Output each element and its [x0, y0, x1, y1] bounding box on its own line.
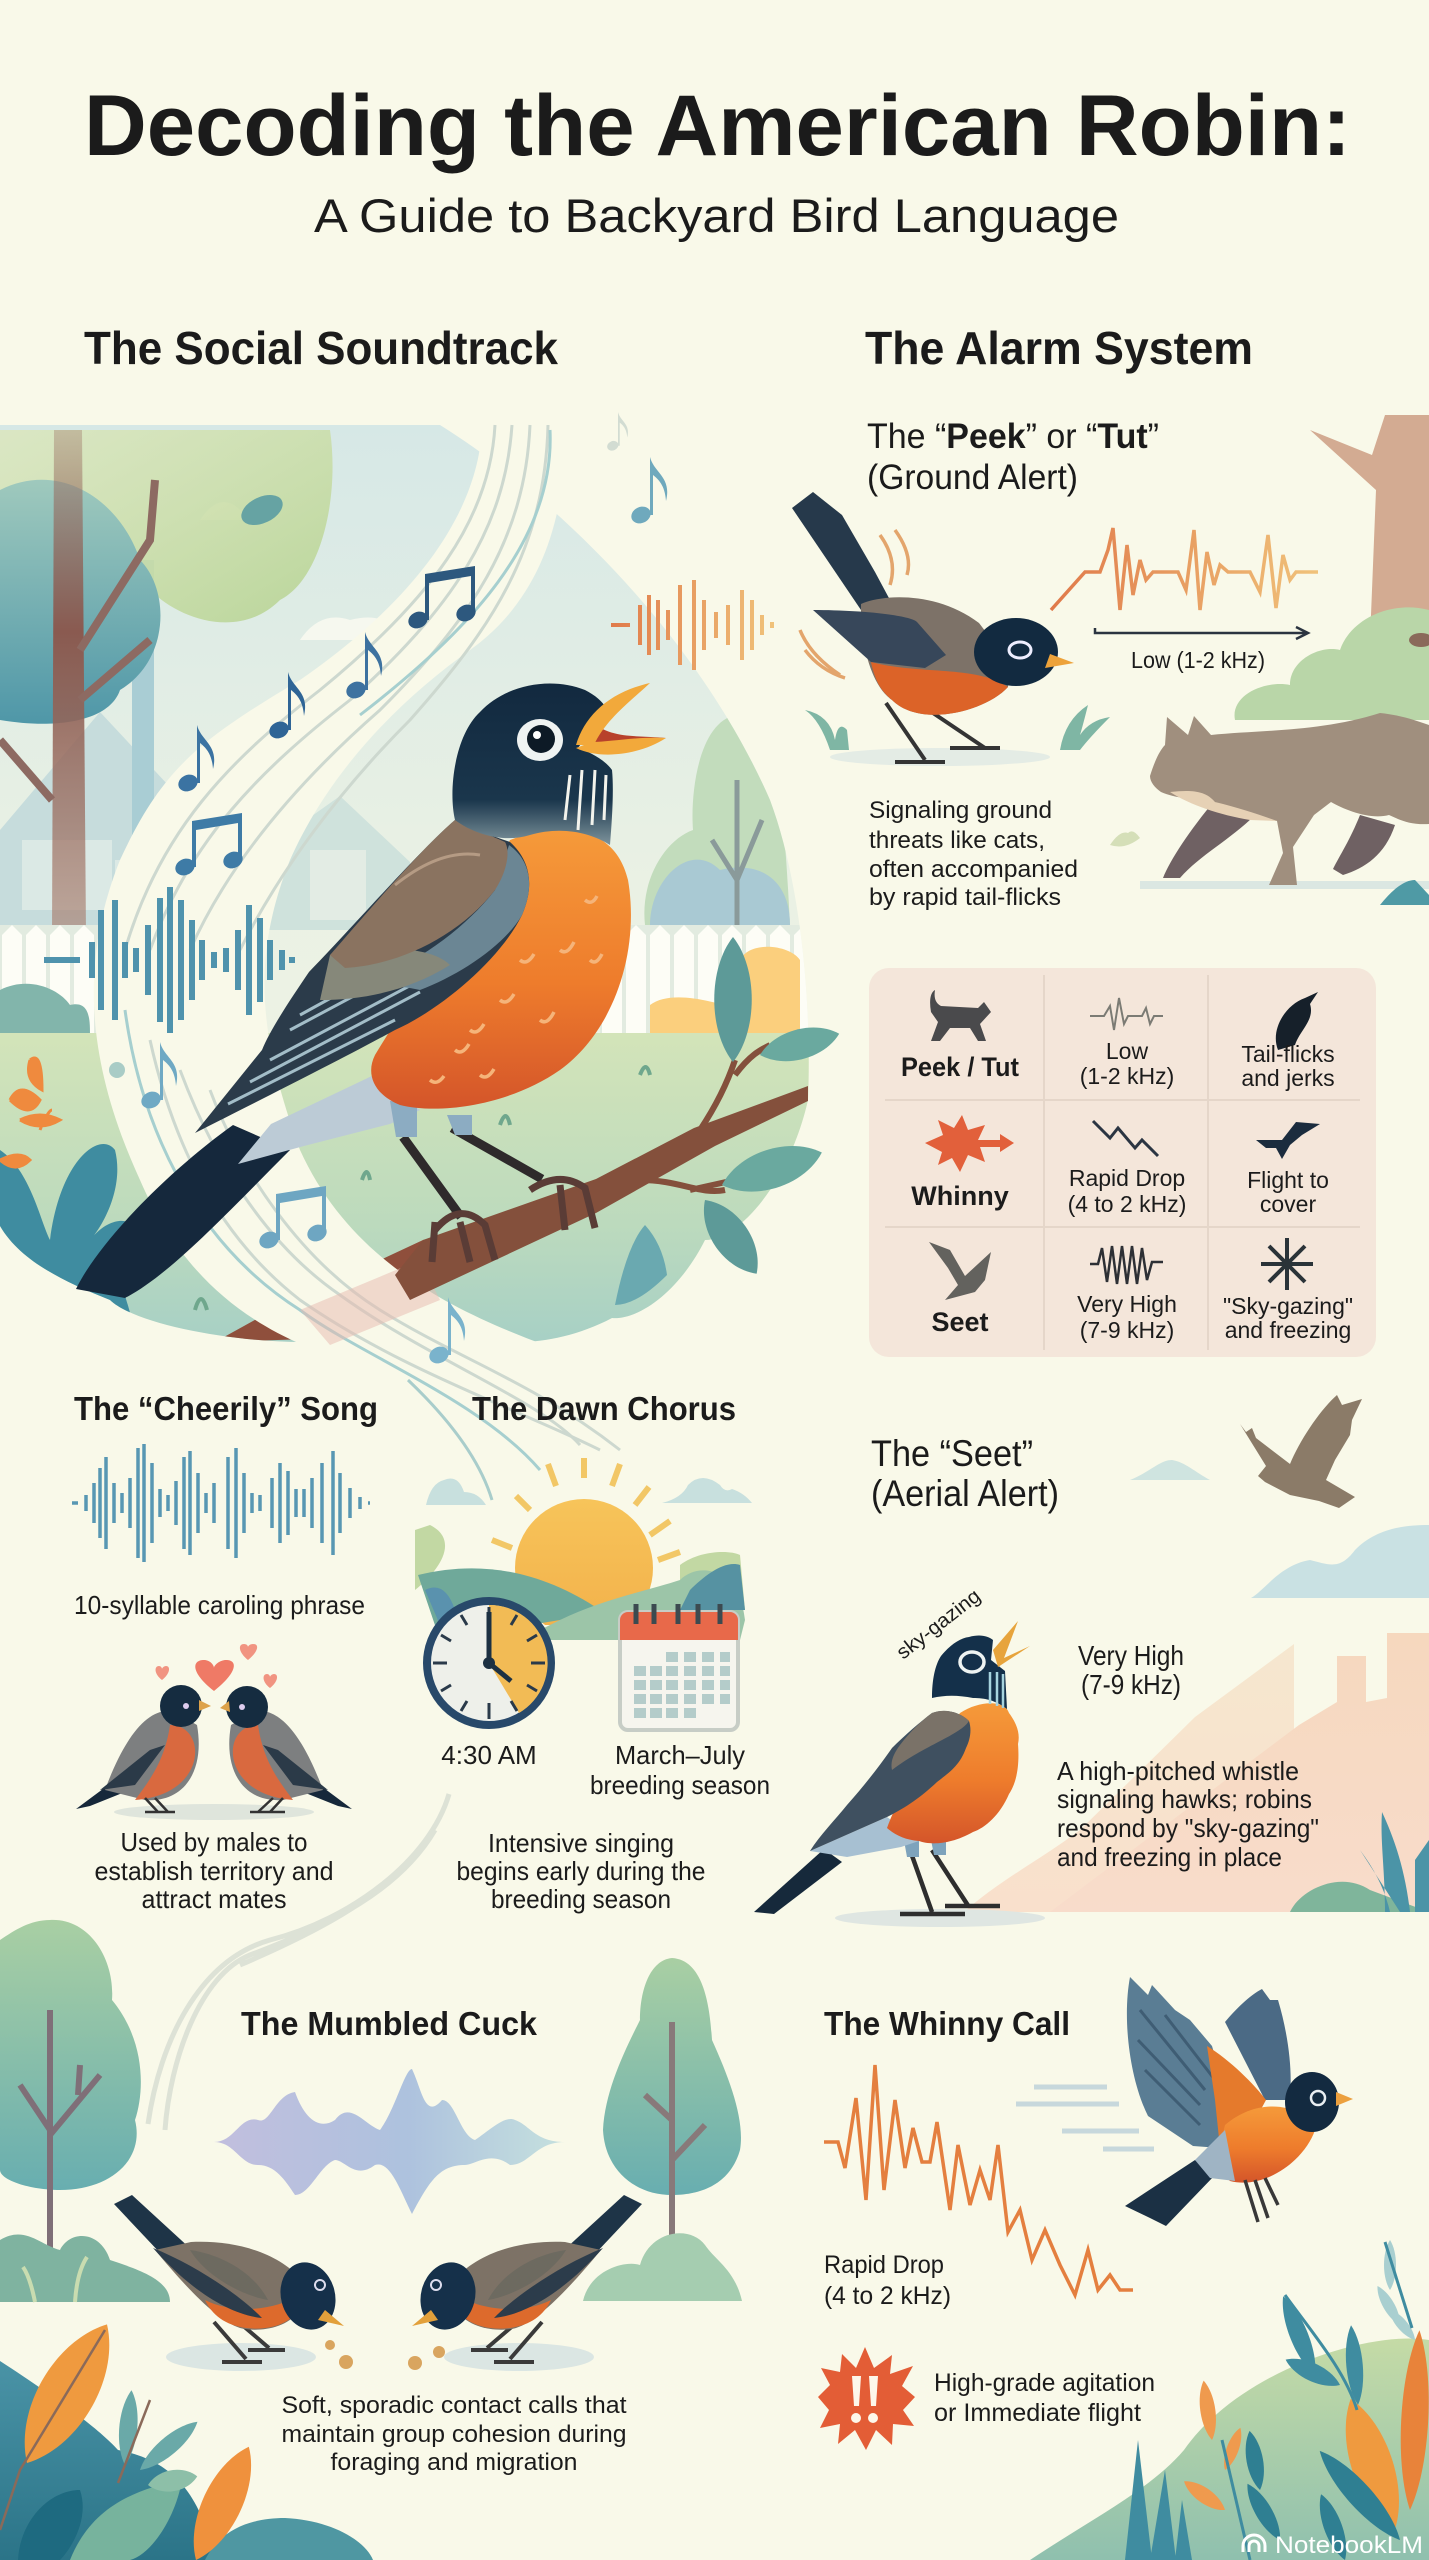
description: cheerily: Used by males to — [120, 1827, 308, 1857]
panel: whinny call — [818, 1977, 1353, 2450]
soundwave: blue — [44, 887, 292, 1033]
subheading: ground alert: (Ground Alert) — [867, 458, 1078, 497]
row: whinny: Rapid Drop — [1069, 1165, 1185, 1191]
icon: snowflake — [1261, 1238, 1313, 1290]
sunrise scene — [415, 1458, 745, 1640]
swirl lines lower left — [148, 1794, 449, 2130]
icon: rapid drop arrow — [1093, 1121, 1158, 1156]
heading: whinny call: The Whinny Call — [824, 2005, 1070, 2042]
icon: hearts — [156, 1644, 277, 1691]
row: peek tut: and jerks — [1241, 1065, 1335, 1091]
row: whinny: Whinny — [911, 1181, 1009, 1211]
row: whinny: Flight to — [1247, 1167, 1329, 1193]
row: seet: Very High — [1077, 1291, 1177, 1317]
caption: 10-syllable: 10-syllable caroling phrase — [74, 1590, 365, 1620]
label: march-july: breeding season — [590, 1770, 770, 1800]
icon: low wave — [1090, 998, 1163, 1030]
wing — [195, 820, 529, 1133]
row: seet: (7-9 kHz) — [1080, 1317, 1174, 1343]
description: seet — [1057, 1756, 1319, 1872]
frequency label: Low (1-2 kHz) — [1131, 647, 1265, 673]
axis arrow — [1095, 627, 1308, 639]
backyard background — [0, 420, 820, 1353]
left tree — [0, 1920, 170, 2302]
row: peek tut: Peek / Tut — [901, 1052, 1019, 1082]
description: dawn chorus: begins early during the — [456, 1856, 706, 1886]
row: whinny: cover — [1260, 1191, 1316, 1217]
panel: singing robin backyard scene — [0, 412, 843, 1470]
row: seet: Seet — [931, 1307, 989, 1337]
soundwave: cheerily — [72, 1444, 370, 1562]
small cloud — [1130, 1460, 1210, 1480]
row: seet — [929, 1238, 1353, 1343]
label: rapid drop: Rapid Drop — [824, 2251, 944, 2279]
beak — [578, 720, 666, 745]
label: rapid drop — [824, 2251, 951, 2310]
icon: hawk — [929, 1242, 991, 1300]
description: dawn chorus: Intensive singing — [488, 1828, 674, 1858]
row: seet: "Sky-gazing" — [1223, 1293, 1353, 1319]
large cloud — [1251, 1525, 1429, 1598]
hawk — [1240, 1395, 1362, 1508]
curved label: sky-gazing — [893, 1585, 985, 1664]
description: ground threats: by rapid tail-flicks — [869, 884, 1061, 911]
head — [452, 683, 613, 845]
heading: cheerily song: The “Cheerily” Song — [74, 1390, 378, 1427]
panel: mumbled cuck — [0, 1920, 742, 2476]
description: mumbled: maintain group cohesion during — [282, 2421, 626, 2448]
seeds — [325, 2340, 445, 2370]
description: cheerily: attract mates — [142, 1884, 286, 1914]
background tree and bush — [1235, 415, 1429, 720]
plants: bottom right foliage — [1030, 2240, 1429, 2560]
description: seet: and freezing in place — [1057, 1842, 1282, 1872]
tail — [76, 1125, 290, 1298]
icon: cat — [930, 990, 991, 1041]
description: agitation: High-grade agitation — [934, 2369, 1155, 2397]
robin: main singing bird — [76, 683, 666, 1298]
whinny waveform — [824, 2065, 1133, 2295]
description: dawn chorus — [456, 1828, 706, 1914]
description: mumbled: Soft, sporadic contact calls that — [282, 2392, 627, 2419]
heading: mumbled cuck: The Mumbled Cuck — [241, 2005, 538, 2042]
panel: seet aerial alert — [754, 1395, 1429, 1927]
icon: calendar — [620, 1604, 738, 1730]
heading: peek or tut: The “Peek” or “Tut” — [867, 417, 1159, 456]
cat illustration — [1110, 713, 1429, 905]
plant: right of city — [1290, 1812, 1429, 1912]
heading: the social soundtrack: The Social Soundtrack — [84, 322, 558, 374]
description: dawn chorus: breeding season — [491, 1884, 671, 1914]
label: march-july: March–July — [615, 1740, 745, 1770]
heading: the alarm system: The Alarm System — [865, 322, 1253, 374]
label: 4:30 am: 4:30 AM — [441, 1740, 537, 1770]
label: very high — [1078, 1640, 1184, 1700]
legs — [403, 1128, 542, 1217]
clouds — [426, 1478, 752, 1505]
heading: dawn chorus: The Dawn Chorus — [472, 1390, 736, 1427]
label: very high: (7-9 kHz) — [1081, 1669, 1181, 1700]
swirl lines top — [408, 1380, 492, 1500]
soundwave: orange — [611, 580, 772, 670]
birds: courting pair — [76, 1685, 352, 1820]
description: agitation — [934, 2369, 1155, 2427]
label: rapid drop: (4 to 2 kHz) — [824, 2282, 951, 2310]
peach city silhouette — [964, 1633, 1429, 1912]
description: seet: A high-pitched whistle — [1057, 1756, 1299, 1786]
description: ground threats — [869, 797, 1078, 911]
ecg waveform: low frequency — [1051, 528, 1318, 610]
branch with leaves — [395, 937, 843, 1300]
soundwave: mumbled — [214, 2069, 565, 2214]
watermark: NotebookLM: NotebookLM — [1275, 2532, 1423, 2559]
description: agitation: or Immediate flight — [934, 2399, 1141, 2427]
label: march-july — [590, 1740, 770, 1800]
orange breast — [371, 829, 631, 1109]
description: cheerily — [94, 1827, 334, 1914]
description: cheerily: establish territory and — [94, 1856, 334, 1886]
subtitle: A Guide to Backyard Bird Language — [314, 189, 1119, 242]
robins foraging — [114, 2195, 642, 2371]
description: mumbled: foraging and migration — [330, 2449, 578, 2476]
heading: seet: The “Seet” — [871, 1433, 1033, 1474]
robin: sky gazing — [754, 1621, 1045, 1927]
plants: bottom left foliage — [0, 2310, 373, 2560]
feet — [432, 1179, 595, 1262]
description: seet: signaling hawks; robins — [1057, 1784, 1312, 1814]
flying robin — [1125, 1977, 1353, 2226]
speed lines — [1016, 2087, 1154, 2149]
label: very high: Very High — [1078, 1640, 1184, 1671]
row: whinny: (4 to 2 kHz) — [1068, 1191, 1186, 1217]
icon: alarm burst — [818, 2347, 915, 2450]
panel: cheerily song — [72, 1390, 378, 1914]
title: Decoding the American Robin: — [84, 78, 1351, 174]
row: peek tut: Low — [1106, 1038, 1148, 1064]
icon: clock 4:30 — [427, 1601, 551, 1725]
robin: peek alert — [792, 492, 1110, 766]
row: peek tut: Tail-flicks — [1241, 1041, 1335, 1067]
row: peek tut: (1-2 kHz) — [1080, 1063, 1174, 1089]
icon: high frequency wave — [1090, 1246, 1163, 1284]
music notes — [109, 412, 667, 1366]
panel: call comparison table — [869, 968, 1376, 1357]
subheading: aerial alert: (Aerial Alert) — [871, 1473, 1059, 1514]
panel: dawn chorus — [408, 1380, 770, 1914]
panel: peek or tut ground alert — [792, 415, 1429, 911]
icon: plane — [1256, 1122, 1320, 1159]
row: whinny — [911, 1115, 1329, 1217]
description: ground threats: often accompanied — [869, 856, 1078, 883]
description: mumbled — [282, 2392, 627, 2476]
row: peek tut — [901, 990, 1335, 1091]
under-tail patch — [238, 1075, 420, 1164]
icon: burst and arrow — [925, 1115, 1014, 1172]
description: seet: respond by "sky-gazing" — [1057, 1813, 1319, 1843]
description: ground threats: Signaling ground — [869, 797, 1052, 824]
swirl band of musical staff lines — [94, 425, 620, 1470]
row: seet: and freezing — [1225, 1317, 1351, 1343]
right tree — [583, 1958, 742, 2301]
description: ground threats: threats like cats, — [869, 827, 1045, 854]
icon: tail flick — [1276, 992, 1318, 1050]
